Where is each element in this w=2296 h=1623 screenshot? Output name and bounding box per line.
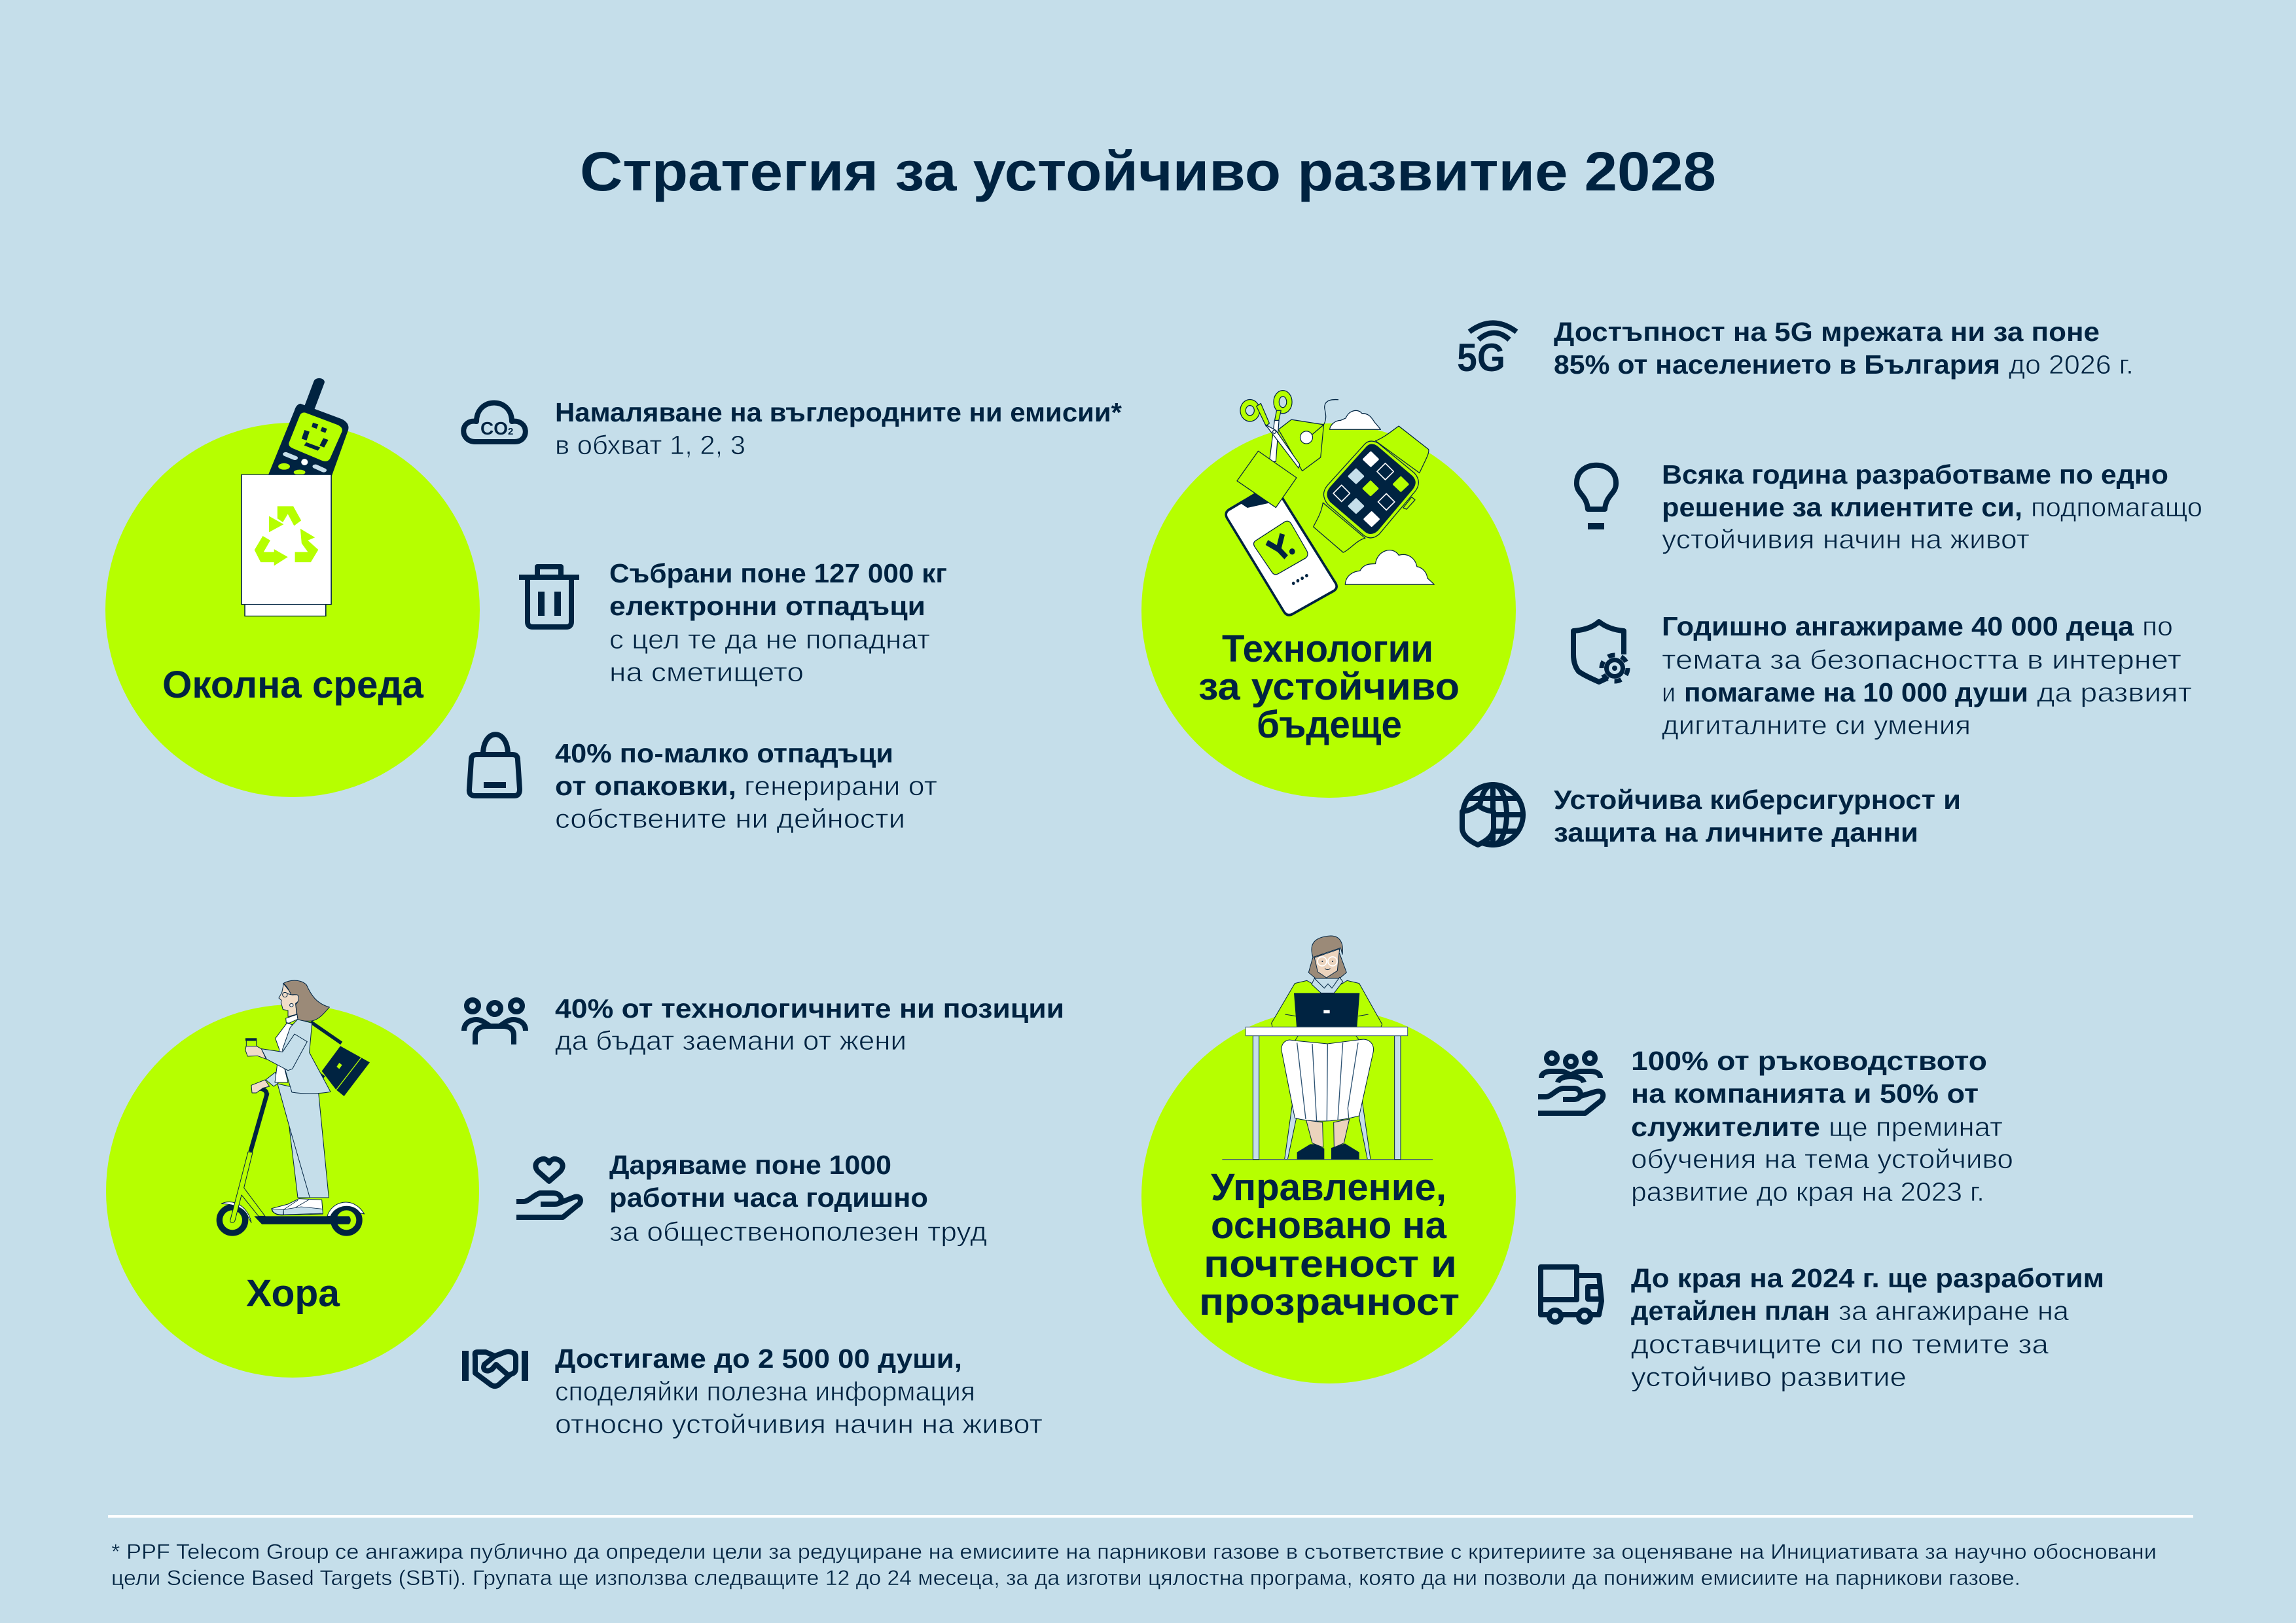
icon: delivery truck — [1541, 1267, 1602, 1322]
heading: technology — [1198, 628, 1460, 746]
icon: globe with shield — [1462, 785, 1523, 845]
icon: hand with heart — [516, 1159, 581, 1217]
heading: governance: прозрачност — [1199, 1281, 1460, 1323]
text block: yearly solution: подпомагащо — [2031, 492, 2202, 522]
text block: cybersecurity — [1554, 785, 1961, 847]
text block: packaging waste: от опаковки, — [555, 771, 736, 801]
text block: 5G coverage — [1554, 317, 2134, 380]
text block: children online safety: и — [1662, 677, 1676, 707]
panel: people — [106, 980, 1064, 1439]
text block: volunteering: за общественополезен труд — [609, 1217, 987, 1247]
circle: governance — [1141, 1009, 1516, 1383]
heading: governance: основано на — [1211, 1204, 1447, 1247]
footnote: * PPF Telecom Group се ангажира публично да определи цели за редуциране на емисиите на парникови газове в съответствие с критериите за оценяване на Инициативата за научно обосновани — [111, 1540, 2157, 1563]
icon: handshake — [462, 1351, 528, 1386]
heading: environment: Околна среда — [162, 664, 424, 706]
text block: electronic waste: на сметището — [609, 657, 804, 687]
text block: children online safety — [1662, 611, 2192, 740]
icon: 5G — [1457, 323, 1516, 380]
heading: governance: Управление, — [1211, 1166, 1446, 1209]
footnote — [111, 1540, 2157, 1590]
heading: governance — [1199, 1166, 1460, 1323]
title: Стратегия за устойчиво развитие 2028 — [580, 141, 1716, 202]
text block: volunteering — [609, 1150, 987, 1247]
text block: 5G coverage: до 2026 г. — [2009, 349, 2134, 380]
text block: packaging waste — [555, 738, 937, 834]
circle: environment — [105, 423, 480, 797]
text block: volunteering: работни часа годишно — [609, 1183, 928, 1213]
text block: training: на компанията и 50% от — [1631, 1079, 1979, 1109]
text block: training: развитие до края на 2023 г. — [1631, 1177, 1984, 1207]
text block: children online safety: да развият — [2037, 677, 2192, 707]
panel: technology — [1141, 317, 2202, 847]
icon: people on a hand — [1538, 1053, 1603, 1113]
illustration: woman at desk with laptop — [1222, 936, 1433, 1160]
text block: yearly solution: Всяка година разработваме по едно — [1662, 459, 2168, 490]
icon: trash bin — [519, 567, 579, 627]
illustration: phone in recycling bin — [242, 382, 348, 616]
text block: reach: Достигаме до 2 500 00 души, — [555, 1344, 962, 1374]
text block: electronic waste — [609, 558, 947, 687]
text block: supplier plan — [1631, 1263, 2104, 1392]
text block: electronic waste: електронни отпадъци — [609, 591, 925, 621]
text block: training: служителите — [1631, 1112, 1820, 1142]
text block: training: 100% от ръководството — [1631, 1046, 1987, 1076]
heading: technology: Технологии — [1222, 628, 1433, 670]
circle: people — [106, 1005, 479, 1378]
text block: training: обучения на тема устойчиво — [1631, 1144, 2013, 1174]
text block: 5G coverage: 85% от населението в България — [1554, 349, 2000, 380]
text block: electronic waste: Събрани поне 127 000 кг — [609, 558, 947, 588]
illustration: woman on scooter — [219, 980, 370, 1233]
text block: children online safety: Годишно ангажираме 40 000 деца — [1662, 611, 2134, 641]
text block: electronic waste: с цел те да не попаднат — [609, 624, 930, 654]
text block: children online safety: дигиталните си умения — [1662, 710, 1971, 740]
text block: cybersecurity: Устойчива киберсигурност и — [1554, 785, 1961, 815]
text block: packaging waste: генерирани от — [744, 771, 937, 801]
text block: women in tech — [555, 993, 1064, 1056]
text block: reach: относно устойчивия начин на живот — [555, 1409, 1043, 1439]
text block: supplier plan: устойчиво развитие — [1631, 1362, 1907, 1392]
text block: emissions: Намаляване на въглеродните ни емисии* — [555, 397, 1122, 427]
text block: yearly solution: устойчивия начин на живот — [1662, 524, 2030, 554]
circle: technology — [1141, 423, 1516, 798]
illustration: phone, watch, scissors and clouds — [1226, 393, 1434, 615]
text block: yearly solution: решение за клиентите си, — [1662, 492, 2022, 522]
text block: emissions — [555, 397, 1122, 460]
text block: children online safety: помагаме на 10 000 души — [1684, 677, 2028, 707]
text block: cybersecurity: защита на личните данни — [1554, 817, 1918, 847]
text block: volunteering: Даряваме поне 1000 — [609, 1150, 891, 1180]
text block: women in tech: да бъдат заемани от жени — [555, 1026, 906, 1056]
text block: supplier plan: за ангажиране на — [1839, 1296, 2069, 1326]
text block: packaging waste: 40% по-малко отпадъци — [555, 738, 893, 768]
text block: supplier plan: До края на 2024 г. ще разработим — [1631, 1263, 2104, 1293]
heading: technology: бъдеще — [1257, 704, 1402, 746]
icon: CO2 cloud — [463, 403, 526, 442]
text block: reach: споделяйки полезна информация — [555, 1376, 975, 1406]
text block: children online safety: по — [2142, 611, 2173, 641]
heading: governance: почтеност и — [1204, 1243, 1457, 1285]
icon: group of people — [464, 1000, 526, 1044]
heading: people: Хора — [246, 1272, 340, 1315]
text block: children online safety: темата за безопасността в интернет — [1662, 645, 2181, 675]
icon: shopping bag — [469, 734, 520, 796]
text block: training: ще преминат — [1829, 1112, 2003, 1142]
icon: CO2 cloud: CO2 — [480, 418, 513, 438]
text block: yearly solution — [1662, 459, 2202, 554]
text block: emissions: в обхват 1, 2, 3 — [555, 430, 745, 460]
text block: supplier plan: детайлен план — [1631, 1296, 1830, 1326]
text block: packaging waste: собствените ни дейности — [555, 804, 905, 834]
text block: training — [1631, 1046, 2013, 1207]
text block: reach — [555, 1344, 1043, 1439]
heading: technology: за устойчиво — [1198, 666, 1460, 708]
icon: shield with gear — [1573, 622, 1628, 682]
panel: governance — [1141, 936, 2104, 1392]
icon: 5G: 5G — [1457, 336, 1505, 380]
panel: environment — [105, 382, 1122, 834]
footnote: цели Science Based Targets (SBTi). Групата ще използва следващите 12 до 24 месеца, за да изготви цялостна програма, която да ни позволи да понижим емисиите на парникови газове. — [111, 1566, 2020, 1590]
text block: women in tech: 40% от технологичните ни позиции — [555, 993, 1064, 1024]
icon: light bulb — [1577, 465, 1616, 529]
text block: 5G coverage: Достъпност на 5G мрежата ни за поне — [1554, 317, 2100, 347]
text block: supplier plan: доставчиците си по темите за — [1631, 1329, 2049, 1359]
